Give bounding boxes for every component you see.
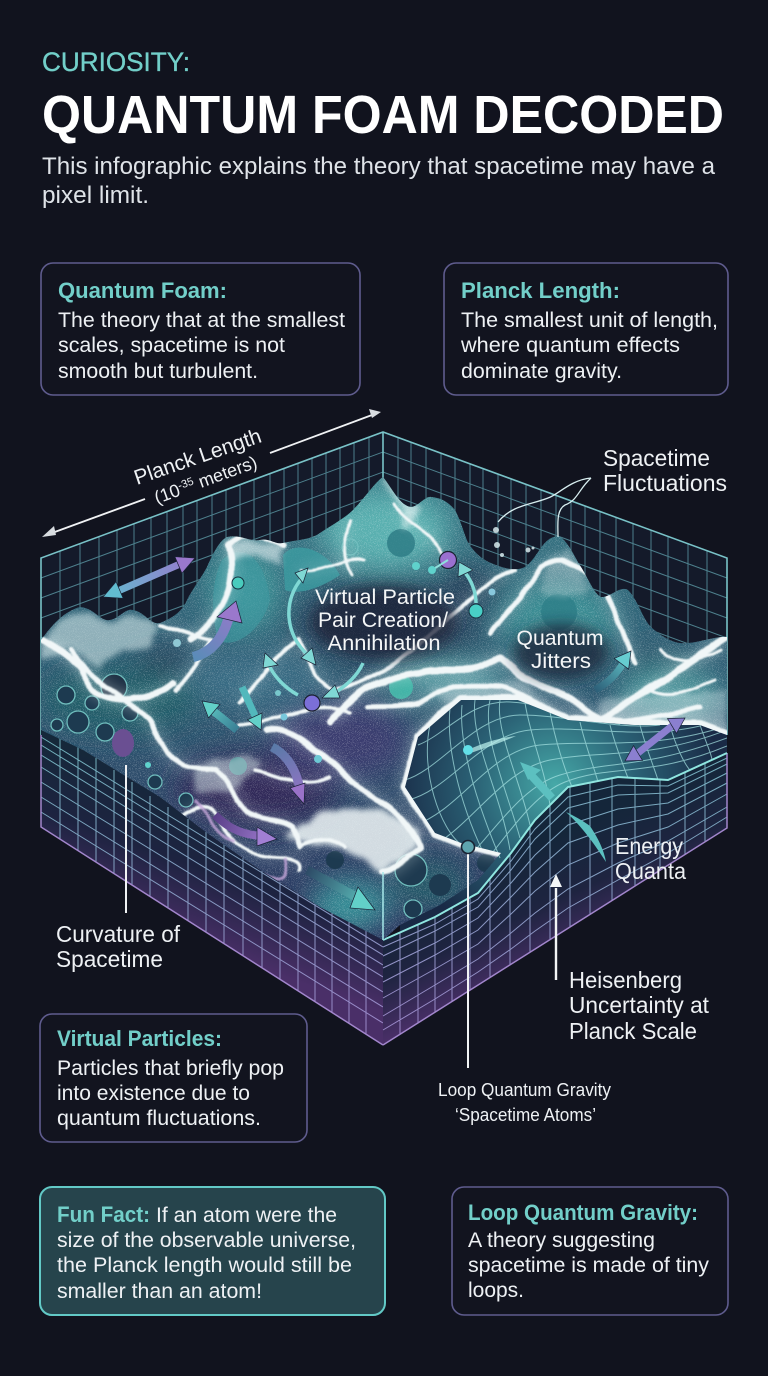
eyebrow heading: CURIOSITY: — [42, 47, 190, 77]
panel: virtual particles: into existence due to — [57, 1081, 250, 1105]
arrow: teal lower right — [307, 870, 375, 910]
panel: loop quantum gravity: Loop Quantum Gravity: — [468, 1200, 698, 1225]
label: planck value: meters) — [191, 452, 260, 493]
label halos — [312, 586, 609, 680]
panel: fun fact — [40, 1187, 385, 1315]
arrow: to particle — [322, 663, 363, 698]
dark teal blobs — [213, 529, 577, 699]
left face — [41, 725, 383, 1045]
arrow: teal left — [202, 701, 237, 730]
annotation: heisenberg uncertainty — [550, 874, 710, 1044]
annotation: planck length dimension — [42, 409, 381, 537]
arrow: annihilation cycle double arc — [289, 568, 316, 665]
particles — [145, 552, 496, 768]
warped spacetime sheet — [383, 700, 727, 940]
annotation: curvature of spacetime: Spacetime — [56, 946, 163, 972]
arrow: purple curved up — [193, 601, 242, 657]
label: virtual particle pair creation: Virtual Particle — [315, 586, 455, 609]
arrow: purple curved down — [272, 747, 305, 804]
soft foam patches — [41, 477, 727, 872]
label: planck value: -35 — [176, 476, 195, 492]
label: planck length: Planck Length — [131, 425, 264, 490]
annotation: heisenberg uncertainty: Uncertainty at — [569, 992, 710, 1018]
annotation: curvature of spacetime — [56, 765, 181, 972]
spacetime fluctuation sprays — [493, 527, 534, 557]
panel: planck length: The smallest unit of length, — [461, 308, 718, 332]
panel: quantum foam: The theory that at the smallest — [58, 308, 345, 332]
annotation: curvature of spacetime: Curvature of — [56, 921, 181, 947]
arrow: from particle up left — [263, 653, 298, 695]
panel: fun fact: the Planck length would still be — [57, 1253, 352, 1277]
panel: virtual particles: Particles that briefly pop — [57, 1056, 284, 1080]
annotation: heisenberg uncertainty: Heisenberg — [569, 967, 682, 993]
panel: planck length: where quantum effects — [460, 333, 680, 357]
annotation: spacetime fluctuations — [498, 445, 727, 537]
label: planck value: (10 — [152, 480, 183, 508]
annotation: loop quantum gravity atoms: ‘Spacetime Atoms’ — [455, 1105, 596, 1125]
panel: fun fact: smaller than an atom! — [57, 1279, 262, 1303]
panel: quantum foam: smooth but turbulent. — [58, 359, 258, 383]
panel: virtual particles — [40, 1014, 307, 1142]
foam bubbles — [51, 512, 495, 918]
label: quantum jitters: Jitters — [531, 650, 591, 673]
panel: quantum foam — [41, 263, 360, 395]
annotation: energy quanta: Energy — [615, 833, 683, 859]
annotation: spacetime fluctuations: Fluctuations — [603, 470, 727, 496]
panel: quantum foam: Quantum Foam: — [58, 278, 227, 303]
speckle texture — [41, 470, 727, 950]
panel: loop quantum gravity — [452, 1187, 728, 1315]
title: QUANTUM FOAM DECODED — [42, 85, 724, 145]
annotation: loop quantum gravity atoms — [438, 840, 611, 1125]
label: virtual particle pair creation: Annihilation — [328, 632, 440, 655]
white foam ridges — [43, 505, 727, 872]
header — [42, 47, 724, 209]
panel: loop quantum gravity: A theory suggesting — [468, 1228, 655, 1252]
lilac veins — [195, 800, 287, 879]
purple bubble — [112, 729, 134, 757]
arrow: planck length right — [270, 409, 381, 453]
foam surface — [40, 470, 727, 950]
arrow: particle right curve — [458, 562, 476, 603]
foam block diagram — [40, 432, 727, 1045]
subtitle: pixel limit. — [42, 182, 149, 209]
arrow: planck length left — [42, 499, 145, 537]
energy glow spot — [463, 736, 516, 755]
arrow: teal down — [242, 687, 262, 730]
panel: planck length — [444, 263, 728, 395]
arrow: purple curved right — [215, 815, 277, 846]
panel: planck length: dominate gravity. — [461, 359, 622, 383]
arrow: energy quanta — [520, 762, 606, 862]
annotation: energy quanta: Quanta — [615, 858, 686, 884]
panel: quantum foam: scales, spacetime is not — [58, 333, 285, 357]
arrow: jitters — [595, 651, 631, 690]
back wall grids — [41, 432, 727, 735]
arrow: double purple teal top left — [103, 557, 195, 598]
annotation: loop quantum gravity atoms: Loop Quantum Gravity — [438, 1080, 611, 1100]
panel: fun fact: If an atom were the — [156, 1203, 337, 1227]
arrow: purple double right — [625, 718, 685, 761]
foam ridge glow — [43, 505, 727, 872]
annotation: heisenberg uncertainty: Planck Scale — [569, 1018, 697, 1044]
label: virtual particle pair creation: Pair Creation/ — [318, 609, 448, 632]
panel: fun fact: Fun Fact: — [57, 1202, 150, 1227]
panel: fun fact: size of the observable universe, — [57, 1228, 356, 1252]
label: quantum jitters: Quantum — [516, 627, 604, 650]
panel: virtual particles: quantum fluctuations. — [57, 1106, 261, 1130]
front corner edge of foam — [382, 872, 384, 940]
panel: virtual particles: Virtual Particles: — [57, 1026, 222, 1051]
panel: planck length: Planck Length: — [461, 278, 620, 303]
label: virtual particle pair creation — [315, 586, 455, 655]
subtitle: This infographic explains the theory that spacetime may have a — [42, 153, 716, 180]
right face — [383, 753, 727, 1045]
foam colour masses — [40, 490, 725, 931]
annotation: spacetime fluctuations: Spacetime — [603, 445, 710, 471]
panel: loop quantum gravity: loops. — [468, 1278, 524, 1302]
panel: loop quantum gravity: spacetime is made of tiny — [468, 1253, 709, 1277]
